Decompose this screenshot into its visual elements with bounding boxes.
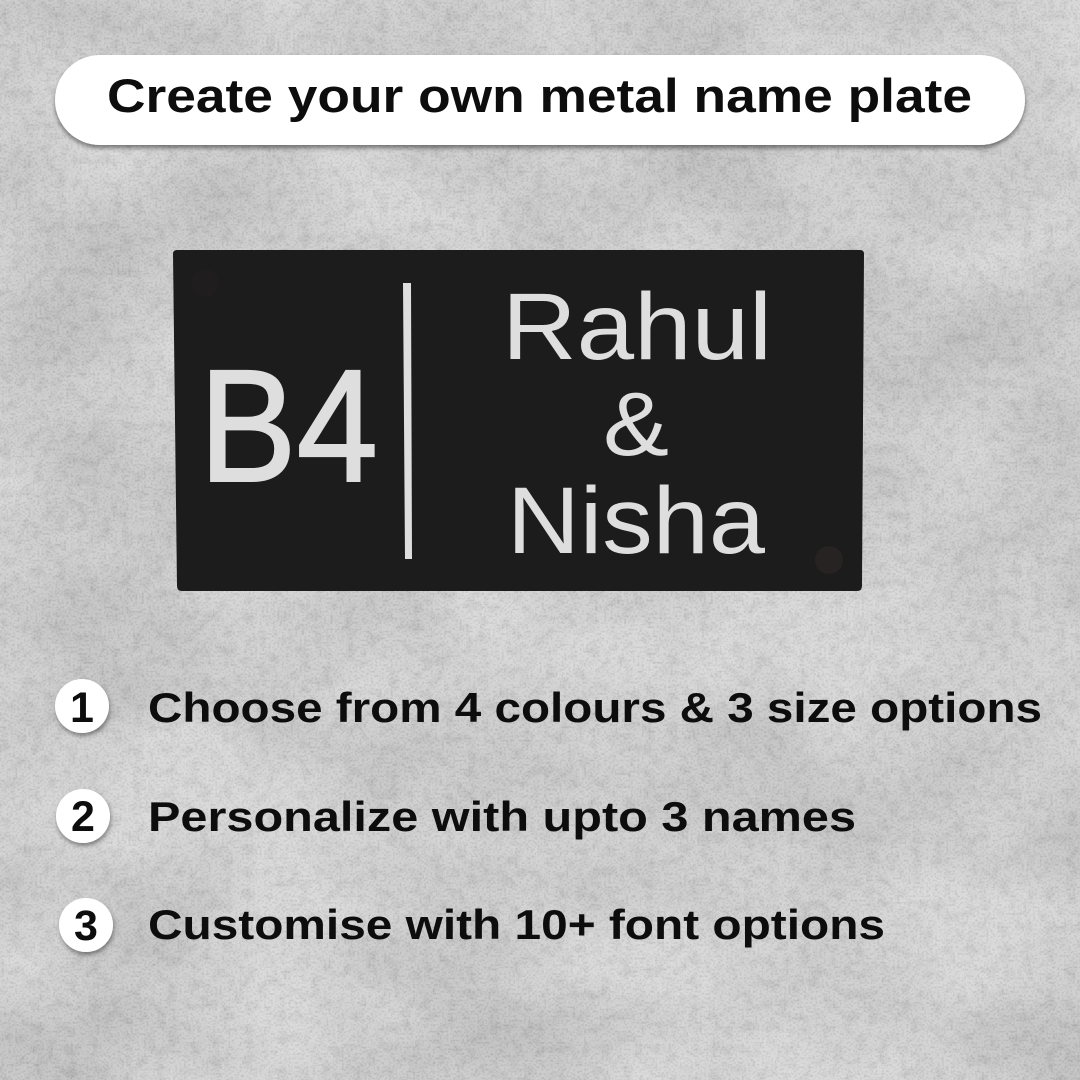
name: Rahul: Rahul [502,274,772,380]
step 1 [55,679,1042,733]
name: Nisha: Nisha [507,468,765,574]
divider [403,283,412,559]
plate body [173,250,864,591]
step 3 [59,898,885,952]
number badge 1: 1 [70,684,94,732]
step 1 text: Choose from 4 colours & 3 size options [148,684,1042,731]
house number: B4 [199,336,378,515]
step 3 text: Customise with 10+ font options [148,901,885,948]
number badge 3 [59,898,113,952]
step 2 [56,789,856,843]
metal name plate [173,250,864,591]
ampersand: & [603,375,669,475]
title pill [55,55,1025,145]
screw hole: bottom right [815,546,843,574]
number badge 2 [56,789,110,843]
step 2 text: Personalize with upto 3 names [148,793,856,840]
number badge 1 [55,679,109,733]
title: Create your own metal name plate [107,69,972,122]
number badge 2: 2 [71,793,95,841]
screw hole: top left [191,269,219,297]
number badge 3: 3 [74,902,98,950]
